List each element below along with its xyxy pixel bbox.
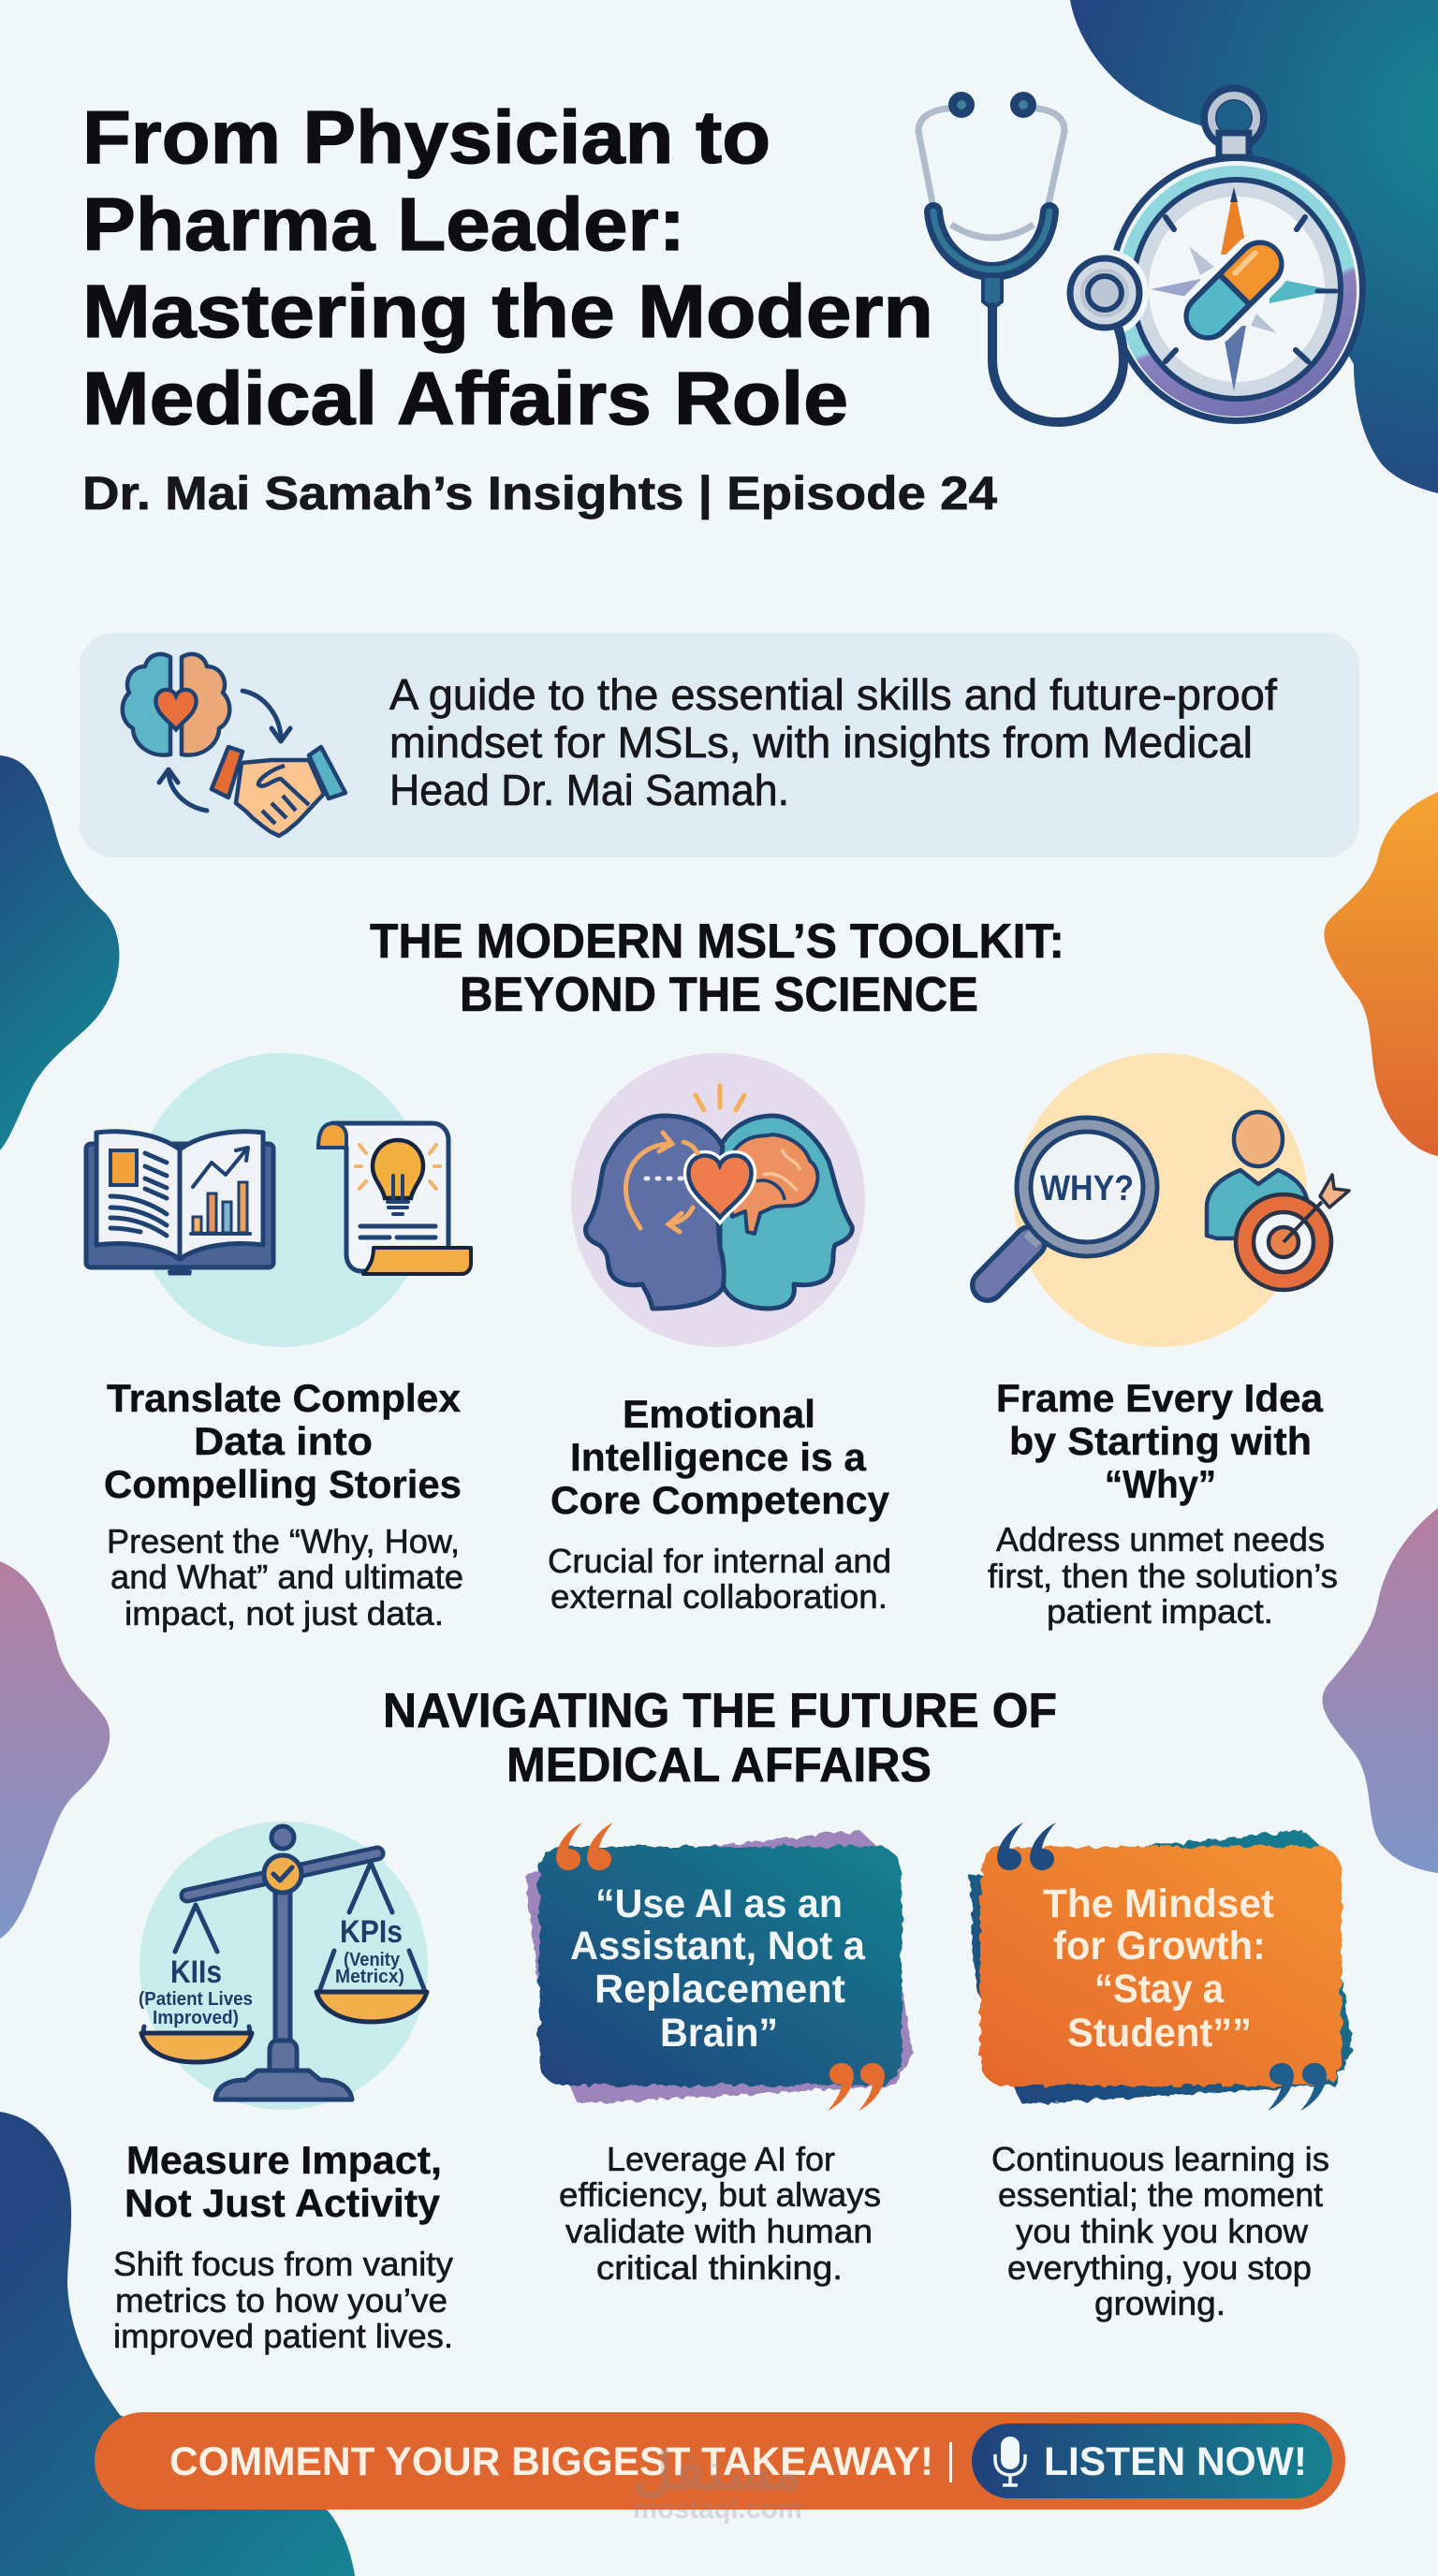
blob: left purple <box>0 1561 110 1939</box>
card text: AI: critical thinking. <box>596 2248 843 2287</box>
scale labels: Metricx) <box>335 1967 404 1987</box>
icon: two heads with heart and brain <box>586 1086 852 1309</box>
heading: toolkit <box>370 915 1064 1022</box>
icon: stethoscope <box>918 92 1149 422</box>
blob: left teal <box>0 755 119 1150</box>
quote card: growth <box>969 1822 1353 2111</box>
card heading: Not Just Activity <box>125 2181 441 2225</box>
card heading: Measure Impact, <box>126 2138 442 2182</box>
handshake <box>212 747 345 836</box>
card text: first, then the solution’s <box>988 1557 1338 1595</box>
opening quote mark <box>997 1822 1056 1870</box>
circle: purple <box>571 1053 865 1347</box>
blob: right orange <box>1324 792 1438 1156</box>
scale labels: KPIs <box>340 1914 403 1950</box>
card: measure impact <box>113 2138 453 2355</box>
quote text <box>570 1881 866 2056</box>
card text: and What” and ultimate <box>110 1558 463 1596</box>
icon: microphone <box>995 2437 1025 2485</box>
icon: scale KIIs vs KPIs <box>139 1822 428 2110</box>
blob: top right <box>1070 0 1438 493</box>
quote card: AI <box>525 1822 913 2111</box>
card heading: Core Competency <box>550 1478 890 1522</box>
quote text: “Stay a <box>1094 1967 1225 2012</box>
card heading <box>104 1376 462 1506</box>
heading: toolkit: THE MODERN MSL’S TOOLKIT: <box>370 915 1064 969</box>
card text: growth: essential; the moment <box>998 2175 1323 2214</box>
heading: future <box>383 1684 1057 1793</box>
watermark: mostaql.com <box>633 2494 802 2525</box>
card text: impact, not just data. <box>125 1594 444 1632</box>
watermark: مستقل <box>633 2441 802 2502</box>
icon: magnifier with WHY <box>988 1118 1157 1285</box>
title <box>82 95 933 440</box>
card text: AI <box>559 2140 881 2287</box>
card text: growth: growing. <box>1094 2284 1225 2322</box>
brain <box>123 654 229 755</box>
icon: compass with pill <box>1108 93 1366 424</box>
card heading: Emotional <box>623 1392 815 1436</box>
card text: Address unmet needs <box>996 1520 1325 1559</box>
scale labels: KIIs <box>170 1954 222 1990</box>
title: Pharma Leader: <box>82 183 685 266</box>
rays and arrows <box>696 1086 744 1110</box>
quote text: Assistant, Not a <box>570 1924 866 1969</box>
quote text <box>1043 1881 1274 2056</box>
card text: AI: efficiency, but always <box>559 2175 881 2214</box>
intro text: A guide to the essential skills and future-proof <box>389 670 1277 719</box>
quote text: Student”” <box>1067 2011 1252 2056</box>
quote text: Brain” <box>660 2011 778 2056</box>
icon: brain heart handshake cycle <box>123 654 345 836</box>
title: Mastering the Modern <box>82 270 933 353</box>
card heading <box>550 1392 890 1522</box>
quote text: for Growth: <box>1053 1924 1266 1969</box>
card heading: by Starting with <box>1009 1419 1312 1463</box>
card text <box>988 1520 1338 1631</box>
intro text <box>389 670 1277 814</box>
card heading: “Why” <box>1105 1462 1216 1506</box>
card text: Shift focus from vanity <box>113 2245 453 2283</box>
icon: person with target <box>1207 1112 1349 1290</box>
card: start with why <box>988 1376 1338 1631</box>
right head <box>720 1116 852 1309</box>
card text: growth: everything, you stop <box>1007 2248 1312 2287</box>
listen now button <box>972 2423 1332 2498</box>
card: emotional intelligence <box>548 1392 891 1616</box>
card text: Crucial for internal and <box>548 1542 891 1580</box>
card text: growth: you think you know <box>1016 2212 1309 2250</box>
card text: external collaboration. <box>550 1577 888 1616</box>
card heading <box>996 1376 1324 1506</box>
opening quote mark <box>556 1822 613 1870</box>
brain <box>730 1134 817 1234</box>
icon: magnifier with WHY: WHY? <box>1040 1169 1134 1208</box>
watermark <box>633 2441 802 2525</box>
card heading: Compelling Stories <box>104 1462 462 1506</box>
scale labels: (Venity <box>344 1950 401 1970</box>
title: From Physician to <box>82 95 770 179</box>
blob: right purple <box>1322 1508 1438 1873</box>
intro text: mindset for MSLs, with insights from Medical <box>389 718 1253 767</box>
card text <box>113 2245 453 2355</box>
closing quote mark <box>828 2063 885 2111</box>
panel: intro <box>80 633 1359 857</box>
heart <box>688 1155 752 1218</box>
card text: growth: Continuous learning is <box>991 2140 1329 2178</box>
card text: AI: validate with human <box>565 2212 873 2250</box>
card heading: Translate Complex <box>107 1376 462 1420</box>
card heading: Data into <box>194 1419 373 1463</box>
scale labels: (Patient Lives <box>139 1989 253 2010</box>
scale labels: Improved) <box>153 2008 239 2028</box>
card text: Present the “Why, How, <box>107 1522 460 1560</box>
compass ring handle <box>1209 93 1259 157</box>
icon: scroll with lightbulb <box>318 1123 471 1274</box>
cta text: COMMENT YOUR BIGGEST TAKEAWAY! <box>169 2439 933 2484</box>
subtitle: Dr. Mai Samah’s Insights | Episode 24 <box>82 467 997 520</box>
card heading: Frame Every Idea <box>996 1376 1324 1420</box>
heading: toolkit: BEYOND THE SCIENCE <box>460 968 978 1022</box>
card text <box>548 1542 891 1616</box>
card text: improved patient lives. <box>113 2317 453 2355</box>
closing quote mark <box>1268 2063 1327 2111</box>
compass needles <box>1151 187 1336 391</box>
call to action bar <box>95 2412 1345 2510</box>
card heading <box>125 2138 442 2225</box>
card heading: Intelligence is a <box>570 1435 867 1479</box>
card text: patient impact. <box>1047 1592 1273 1631</box>
card text <box>107 1522 463 1632</box>
card text: metrics to how you’ve <box>115 2281 448 2320</box>
listen now button: LISTEN NOW! <box>1044 2439 1307 2484</box>
pill capsule <box>1165 221 1303 359</box>
card: translate data <box>104 1376 463 1632</box>
scale labels <box>139 1914 404 2028</box>
heading: future: MEDICAL AFFAIRS <box>506 1738 932 1793</box>
left head <box>586 1116 724 1309</box>
heart <box>155 690 197 729</box>
circle: yellow <box>1014 1053 1308 1347</box>
quote text: The Mindset <box>1043 1881 1274 1926</box>
card text: AI: Leverage AI for <box>607 2140 835 2178</box>
quote text: Replacement <box>594 1967 845 2012</box>
cycle arrows <box>159 691 290 811</box>
blob: bottom left <box>0 2112 355 2576</box>
quote text: “Use AI as an <box>595 1881 843 1926</box>
icon: open book with chart <box>86 1132 273 1273</box>
circle: teal <box>135 1053 429 1347</box>
card text: growth <box>991 2140 1329 2322</box>
heading: future: NAVIGATING THE FUTURE OF <box>383 1684 1057 1738</box>
intro text: Head Dr. Mai Samah. <box>389 766 789 814</box>
title: Medical Affairs Role <box>82 357 848 440</box>
